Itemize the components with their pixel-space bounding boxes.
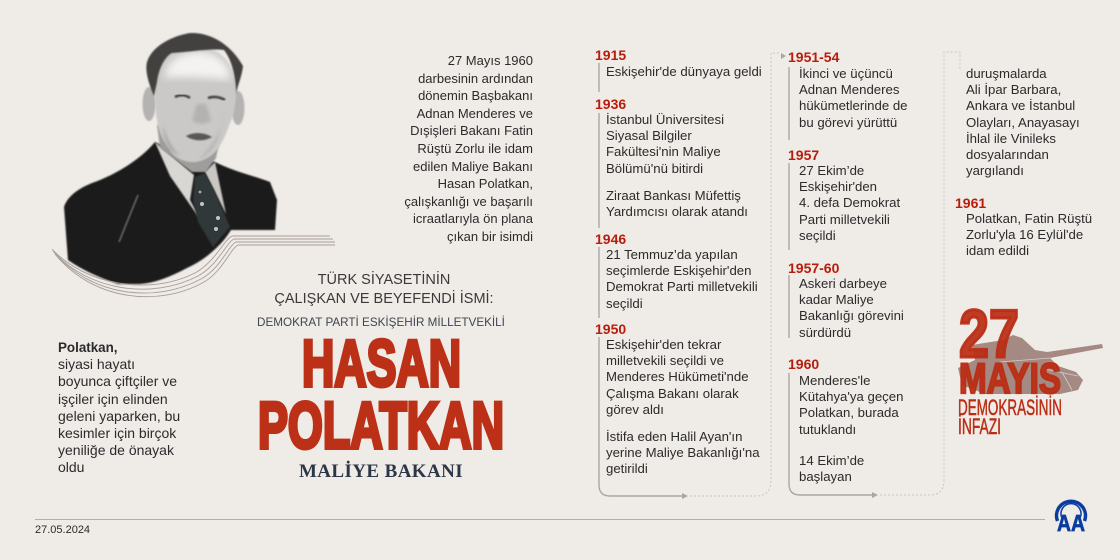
subtitle: ÇALIŞKAN VE BEYEFENDİ İSMİ: xyxy=(274,291,494,307)
side note: oldu xyxy=(58,459,84,475)
timeline column 1: görev aldı xyxy=(606,402,664,417)
timeline column 3: duruşmalarda xyxy=(966,66,1047,81)
side note: kesimler için birçok xyxy=(58,425,176,441)
timeline column 1: yerine Maliye Bakanlığı'na xyxy=(606,445,760,460)
1957-60: 1957-60 xyxy=(788,260,839,276)
timeline column 1: Yardımcısı olarak atandı xyxy=(606,204,748,219)
timeline column 3: Ankara ve İstanbul xyxy=(966,98,1075,113)
27 Mayıs logo: İNFAZI xyxy=(958,414,1001,439)
side note: geleni yaparken, bu xyxy=(58,408,180,424)
decorative swoosh lines xyxy=(52,236,335,297)
timeline column 3: Olayları, Anayasayı xyxy=(966,115,1080,130)
intro text: Dışişleri Bakanı Fatin xyxy=(410,123,533,138)
side note: Polatkan, xyxy=(58,340,118,355)
forehead highlight xyxy=(165,52,230,80)
timeline column 1: Eskişehir'de dünyaya geldi xyxy=(606,64,762,79)
1915: 1915 xyxy=(595,47,626,63)
footer rule xyxy=(35,519,1045,520)
intro text: Hasan Polatkan, xyxy=(438,176,533,191)
timeline column 1: Eskişehir'den tekrar xyxy=(606,337,721,352)
timeline column 2: başlayan xyxy=(799,469,852,484)
timeline column 3: Zorlu'yla 16 Eylül'de xyxy=(966,227,1083,242)
timeline column 3: Polatkan, Fatin Rüştü xyxy=(966,211,1092,226)
main name: POLATKAN xyxy=(258,388,504,462)
1961: 1961 xyxy=(955,195,986,211)
timeline column 2: Menderes'le xyxy=(799,373,870,388)
tie xyxy=(193,173,230,247)
1950: 1950 xyxy=(595,321,626,337)
main name: HASAN xyxy=(302,326,461,400)
suit xyxy=(64,142,277,284)
timeline column 2: Bakanlığı görevini xyxy=(799,308,904,323)
timeline column 1: seçildi xyxy=(606,296,643,311)
jaw shade xyxy=(163,110,222,160)
timeline column 2: kadar Maliye xyxy=(799,292,874,307)
timeline column 2: İkinci ve üçüncü xyxy=(799,66,893,81)
timeline column 1: getirildi xyxy=(606,461,648,476)
timeline column 1: Fakültesi'nin Maliye xyxy=(606,144,721,159)
side note xyxy=(58,340,180,475)
timeline column 2: 27 Ekim’de xyxy=(799,163,864,178)
timeline column 2: tutuklandı xyxy=(799,422,856,437)
intro text: çalışkanlığı ve başarılı xyxy=(404,194,533,209)
party line: DEMOKRAT PARTİ ESKİŞEHİR MİLLETVEKİLİ xyxy=(257,316,505,329)
timeline column 3: İhlal ile Vinileks xyxy=(966,131,1056,146)
timeline column 1: Demokrat Parti milletvekili xyxy=(606,279,758,294)
icon: AA logo: AA xyxy=(1057,510,1085,536)
27 numerals: 27 xyxy=(959,296,1019,372)
timeline column 3: dosyalarından xyxy=(966,147,1049,162)
timeline column 2: Kütahya'ya geçen xyxy=(799,389,903,404)
1960: 1960 xyxy=(788,356,819,372)
timeline column 1: Siyasal Bilgiler xyxy=(606,128,692,143)
1957: 1957 xyxy=(788,147,819,163)
timeline column 2: Parti milletvekili xyxy=(799,212,890,227)
face xyxy=(155,47,236,162)
hair xyxy=(146,33,243,96)
side note: işçiler için elinden xyxy=(58,391,168,407)
side note: siyasi hayatı xyxy=(58,356,135,372)
timeline column 2: Askeri darbeye xyxy=(799,276,887,291)
intro text: icraatlarıyla ön plana xyxy=(413,211,533,226)
shirt collar xyxy=(155,142,202,222)
subtitle xyxy=(274,271,494,307)
intro text: çıkan bir isimdi xyxy=(447,229,533,244)
portrait photo xyxy=(52,32,335,298)
timeline column 3 xyxy=(955,66,1092,258)
timeline column 2: Adnan Menderes xyxy=(799,82,899,97)
timeline column 1: İstifa eden Halil Ayan'ın xyxy=(606,429,742,444)
facial features xyxy=(175,95,225,100)
timeline column 3: idam edildi xyxy=(966,243,1029,258)
timeline column 2: 4. defa Demokrat xyxy=(799,195,900,210)
1936: 1936 xyxy=(595,96,626,112)
subtitle: TÜRK SİYASETİNİN xyxy=(318,272,450,288)
timeline column 1: Menderes Hükümeti'nde xyxy=(606,369,749,384)
timeline column 1: seçimlerde Eskişehir'den xyxy=(606,263,751,278)
timeline column 2: sürdürdü xyxy=(799,325,851,340)
1946: 1946 xyxy=(595,231,626,247)
intro text: Adnan Menderes ve xyxy=(417,106,533,121)
intro text: 27 Mayıs 1960 xyxy=(448,53,533,68)
May label: MAYIS xyxy=(959,355,1061,403)
intro text: darbesinin ardından xyxy=(418,71,533,86)
neck xyxy=(157,125,222,172)
timeline column 1: milletvekili seçildi ve xyxy=(606,353,724,368)
side note: yeniliğe de önayak xyxy=(58,442,174,458)
timeline column 2 xyxy=(788,49,908,484)
timeline column 1: İstanbul Üniversitesi xyxy=(606,112,724,127)
timeline column 2: bu görevi yürüttü xyxy=(799,115,897,130)
ears xyxy=(142,87,156,121)
timeline column 3: Ali İpar Barbara, xyxy=(966,82,1061,97)
side note: boyunca çiftçiler ve xyxy=(58,373,177,389)
timeline column 2: seçildi xyxy=(799,228,836,243)
intro text: edilen Maliye Bakanı xyxy=(413,159,533,174)
date: 27.05.2024 xyxy=(35,524,90,536)
timeline column 1: Çalışma Bakanı olarak xyxy=(606,386,739,401)
role: MALİYE BAKANI xyxy=(299,461,463,482)
timeline column 1: 21 Temmuz’da yapılan xyxy=(606,247,738,262)
timeline column 1: Bölümü'nü bitirdi xyxy=(606,161,703,176)
timeline column 2: Polatkan, burada xyxy=(799,405,899,420)
1951-54: 1951-54 xyxy=(788,49,839,65)
intro text: Rüştü Zorlu ile idam xyxy=(417,141,533,156)
icon: tank xyxy=(958,335,1103,394)
intro text xyxy=(404,53,533,244)
lapels xyxy=(119,195,138,242)
timeline column 1: Ziraat Bankası Müfettiş xyxy=(606,188,741,203)
timeline column 2: hükümetlerinde de xyxy=(799,98,908,113)
timeline column 2: Eskişehir'den xyxy=(799,179,877,194)
timeline column 1 xyxy=(595,47,762,476)
timeline column 2: 14 Ekim’de xyxy=(799,453,864,468)
timeline column 3: yargılandı xyxy=(966,163,1024,178)
intro text: dönemin Başbakanı xyxy=(418,88,533,103)
